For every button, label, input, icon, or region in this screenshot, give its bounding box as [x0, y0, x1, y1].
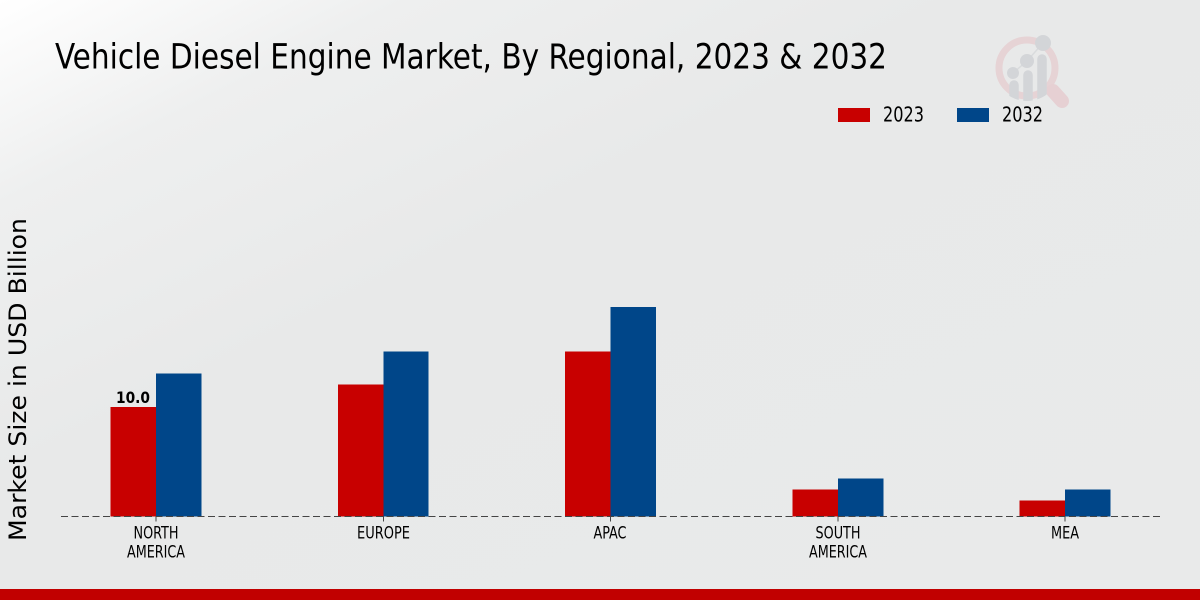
- label: Europe: EUROPE: [357, 524, 410, 542]
- label: North America: AMERICA: [127, 542, 186, 562]
- legend item: 2032: [957, 102, 1043, 126]
- data label: 10.0: [116, 388, 150, 407]
- label: South America: [809, 524, 868, 562]
- bar chart: [61, 307, 1160, 522]
- y axis label: Market Size in USD Billion: [4, 218, 32, 541]
- category labels: [127, 524, 1080, 562]
- legend: [838, 102, 1043, 126]
- bars: APAC: [565, 307, 656, 516]
- legend item: 2032: 2032: [1002, 102, 1043, 126]
- label: South America: AMERICA: [809, 542, 868, 562]
- bars: North America: [110, 374, 202, 516]
- logo watermark: [999, 35, 1062, 110]
- label: APAC: APAC: [594, 524, 626, 542]
- label: North America: NORTH: [134, 524, 178, 542]
- baseline: [61, 516, 1160, 518]
- legend item: 2023: 2023: [883, 102, 924, 126]
- label: South America: SOUTH: [816, 524, 860, 542]
- title: Vehicle Diesel Engine Market, By Regional, 2023 & 2032: [55, 38, 887, 78]
- legend item: 2023: [838, 102, 924, 126]
- footer bar: [0, 589, 1200, 600]
- bars: Europe: [338, 352, 428, 516]
- bars: South America: [792, 478, 884, 516]
- label: MEA: MEA: [1051, 524, 1080, 542]
- label: North America: [127, 524, 186, 562]
- bars: MEA: [1020, 490, 1110, 516]
